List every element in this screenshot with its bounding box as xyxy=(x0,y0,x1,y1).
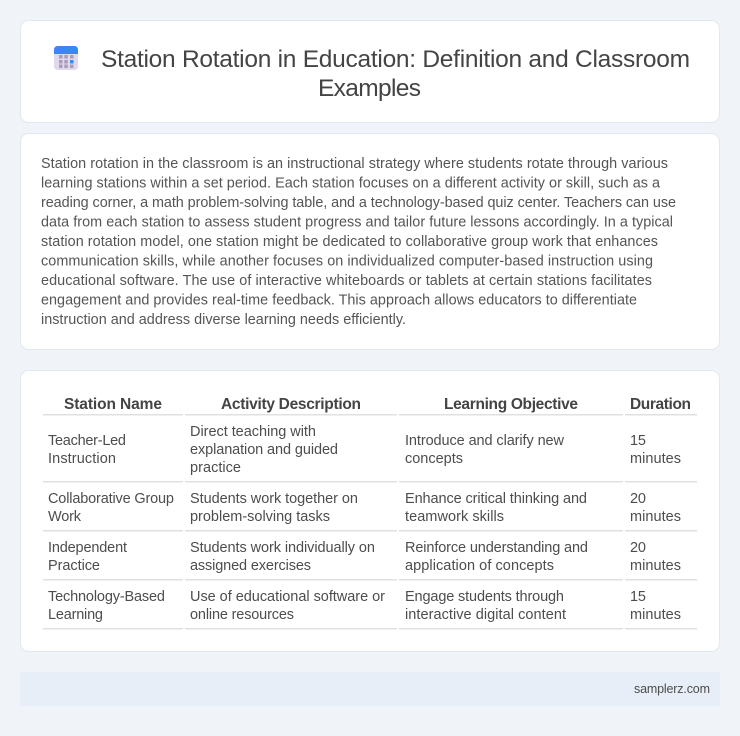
text block: definition paragraph: data from each station to assess student progress and tailor future lessons accordingly. In a typical xyxy=(41,214,673,230)
table row: independent practice: application of concepts xyxy=(405,558,554,574)
table row: collaborative group work: minutes xyxy=(630,509,681,525)
table row: independent practice: assigned exercises xyxy=(190,558,311,574)
text block: definition paragraph: instruction and address diverse learning needs efficiently. xyxy=(41,312,406,328)
table row: technology-based learning: online resources xyxy=(190,607,294,623)
table row: teacher-led instruction: practice xyxy=(190,460,241,476)
table header row: Station Name xyxy=(64,396,162,413)
table row: collaborative group work xyxy=(48,491,681,525)
table row: teacher-led instruction: minutes xyxy=(630,451,681,467)
table row: collaborative group work: Collaborative Group xyxy=(48,491,174,507)
table row: technology-based learning: Learning xyxy=(48,607,103,623)
text block: definition paragraph xyxy=(41,156,676,328)
table row: technology-based learning: 15 xyxy=(630,589,646,605)
table header row: Activity Description xyxy=(221,396,361,413)
table row: collaborative group work: problem-solving tasks xyxy=(190,509,330,525)
table header row: Duration xyxy=(630,396,691,413)
text block: definition paragraph: station rotation model, one station might be dedicated to collaborative group work that enhances xyxy=(41,234,658,250)
table row: teacher-led instruction: concepts xyxy=(405,451,463,467)
icon: calendar xyxy=(54,46,78,70)
title xyxy=(101,46,690,102)
text block: definition paragraph: reading corner, a math problem-solving table, and a technology-based quiz center. Teachers can use xyxy=(41,195,676,211)
title: Examples xyxy=(318,75,421,102)
table row: technology-based learning: interactive digital content xyxy=(405,607,566,623)
table row: teacher-led instruction: 15 xyxy=(630,433,646,449)
text block: definition paragraph: educational software. The use of interactive whiteboards or tablets at certain stations facilitates xyxy=(41,273,652,289)
table row: teacher-led instruction: Teacher-Led xyxy=(48,433,126,449)
table row: collaborative group work: 20 xyxy=(630,491,646,507)
table row: independent practice: minutes xyxy=(630,558,681,574)
table row: independent practice: Students work individually on xyxy=(190,540,375,556)
table row: teacher-led instruction: Direct teaching with xyxy=(190,424,316,440)
table row: teacher-led instruction xyxy=(48,424,681,476)
table row: collaborative group work: teamwork skills xyxy=(405,509,504,525)
table row: independent practice: Practice xyxy=(48,558,100,574)
panel: header xyxy=(20,20,720,122)
table row: independent practice xyxy=(48,540,681,574)
table header row: Learning Objective xyxy=(444,396,578,413)
text block: definition paragraph: Station rotation in the classroom is an instructional strategy where students rotate through various xyxy=(41,156,668,172)
table row: technology-based learning: minutes xyxy=(630,607,681,623)
table row: independent practice: Reinforce understanding and xyxy=(405,540,588,556)
table row: independent practice: Independent xyxy=(48,540,127,556)
text block: definition paragraph: learning stations within a set period. Each station focuses on a different activity or skill, such as a xyxy=(41,176,660,192)
table row: technology-based learning: Engage students through xyxy=(405,589,564,605)
footer credit: samplerz.com xyxy=(634,682,710,696)
table row: independent practice: 20 xyxy=(630,540,646,556)
table row: collaborative group work: Enhance critical thinking and xyxy=(405,491,587,507)
table row: technology-based learning xyxy=(48,589,681,623)
table row: collaborative group work: Work xyxy=(48,509,82,525)
table row: collaborative group work: Students work together on xyxy=(190,491,358,507)
table row: teacher-led instruction: Instruction xyxy=(48,451,116,467)
panel: introduction xyxy=(20,134,720,350)
table row: technology-based learning: Technology-Based xyxy=(48,589,165,605)
text block: definition paragraph: engagement and provides real-time feedback. This approach allows educators to differentiate xyxy=(41,292,637,308)
text block: definition paragraph: communication skills, while another focuses on individualized computer-based instruction using xyxy=(41,254,653,270)
table row: teacher-led instruction: Introduce and clarify new xyxy=(405,433,565,449)
table row: technology-based learning: Use of educational software or xyxy=(190,589,385,605)
panel: station table xyxy=(20,370,720,652)
title: Station Rotation in Education: Definition and Classroom xyxy=(101,46,690,73)
table row: teacher-led instruction: explanation and guided xyxy=(190,442,338,458)
table header row xyxy=(64,396,691,413)
footer xyxy=(20,672,720,706)
